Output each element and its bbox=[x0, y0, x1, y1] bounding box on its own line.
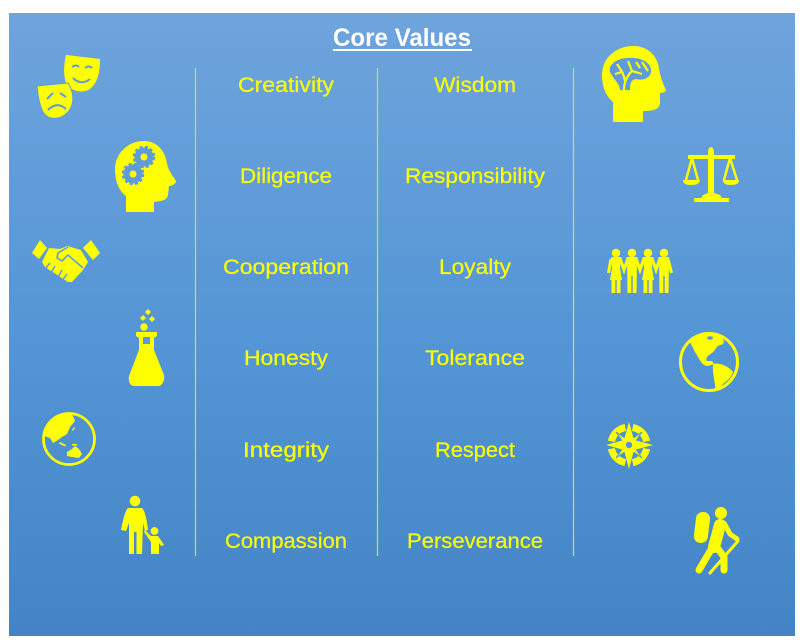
right column of values: Respect bbox=[435, 439, 515, 462]
icon: theatre masks bbox=[37, 55, 100, 118]
icon: head with brain bbox=[602, 46, 666, 122]
left column of values: Diligence bbox=[240, 165, 332, 188]
icon: globe americas bbox=[680, 333, 738, 390]
icon: globe asia bbox=[44, 413, 94, 464]
right column of values: Perseverance bbox=[407, 530, 543, 553]
right column of values: Tolerance bbox=[425, 347, 525, 370]
icon: group of four people bbox=[608, 249, 672, 293]
icon: compass rose bbox=[606, 422, 653, 469]
left column of values: Cooperation bbox=[223, 256, 349, 279]
left column of values: Compassion bbox=[225, 530, 347, 553]
left column of values: Creativity bbox=[238, 74, 335, 97]
left column of values bbox=[223, 74, 349, 553]
title: Core Values bbox=[333, 24, 471, 52]
icon: parent and child bbox=[121, 496, 164, 554]
icon: flask with bubbles bbox=[129, 309, 164, 386]
right column of values: Responsibility bbox=[405, 165, 546, 188]
icon: hiker with backpack bbox=[693, 507, 738, 573]
right column of values: Wisdom bbox=[434, 74, 516, 97]
icon: head with gears bbox=[115, 141, 176, 212]
left column of values: Honesty bbox=[244, 347, 329, 370]
left column of values: Integrity bbox=[243, 439, 330, 462]
column dividers bbox=[196, 68, 574, 556]
right column of values bbox=[405, 74, 546, 553]
icon: balance scales bbox=[683, 147, 739, 202]
icon: handshake bbox=[32, 240, 100, 282]
right column of values: Loyalty bbox=[439, 256, 512, 279]
